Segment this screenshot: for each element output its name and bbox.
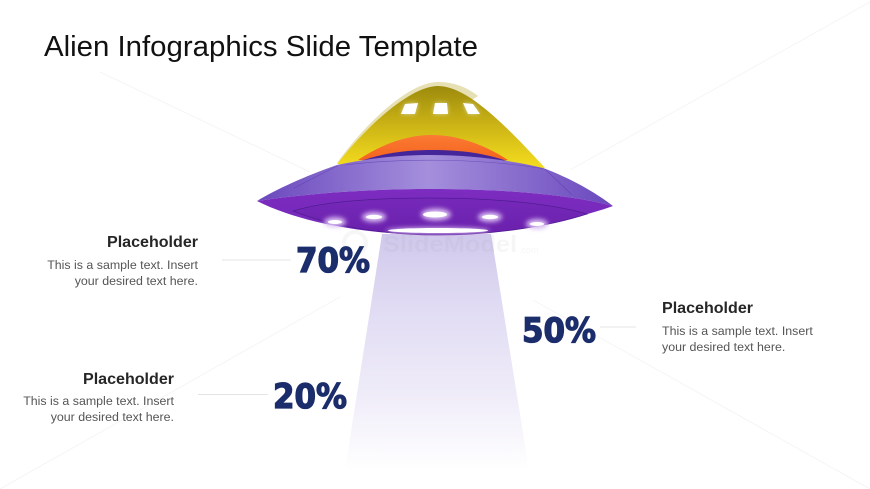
light beam (345, 234, 529, 470)
heading: Placeholder (83, 371, 174, 388)
connector (600, 326, 636, 328)
value: 50% (522, 311, 596, 351)
body text: your desired text here. (51, 410, 174, 424)
saucer lights (324, 208, 548, 229)
dome back highlight (337, 82, 478, 163)
dome window right (463, 103, 480, 114)
watermark: SlideModel (383, 231, 517, 257)
callout: 70% (47, 234, 370, 288)
connector (222, 259, 291, 261)
body text: This is a sample text. Insert (23, 394, 175, 408)
body text: your desired text here. (662, 340, 785, 354)
value: 20% (273, 377, 347, 417)
dark rim (358, 150, 510, 175)
saucer panel lines (294, 160, 572, 195)
heading: Placeholder (662, 300, 753, 317)
saucer bottom (257, 189, 613, 235)
dome window left (401, 103, 418, 114)
beam emitter (386, 228, 490, 234)
body text: This is a sample text. Insert (662, 324, 813, 338)
callout: 50% (522, 300, 813, 354)
value: 70% (296, 241, 370, 281)
dome window centre (433, 103, 448, 114)
watermark (344, 231, 539, 257)
callout: 20% (23, 371, 347, 424)
saucer top (257, 155, 613, 206)
saucer inner line (293, 198, 587, 235)
body text: your desired text here. (75, 274, 198, 288)
title: Alien Infographics Slide Template (44, 31, 478, 63)
watermark: .com (519, 245, 539, 255)
connector (198, 394, 268, 396)
orange glow (358, 135, 508, 160)
body text: This is a sample text. Insert (47, 258, 199, 272)
UFO (257, 82, 613, 235)
heading: Placeholder (107, 234, 198, 251)
dome (337, 86, 545, 175)
